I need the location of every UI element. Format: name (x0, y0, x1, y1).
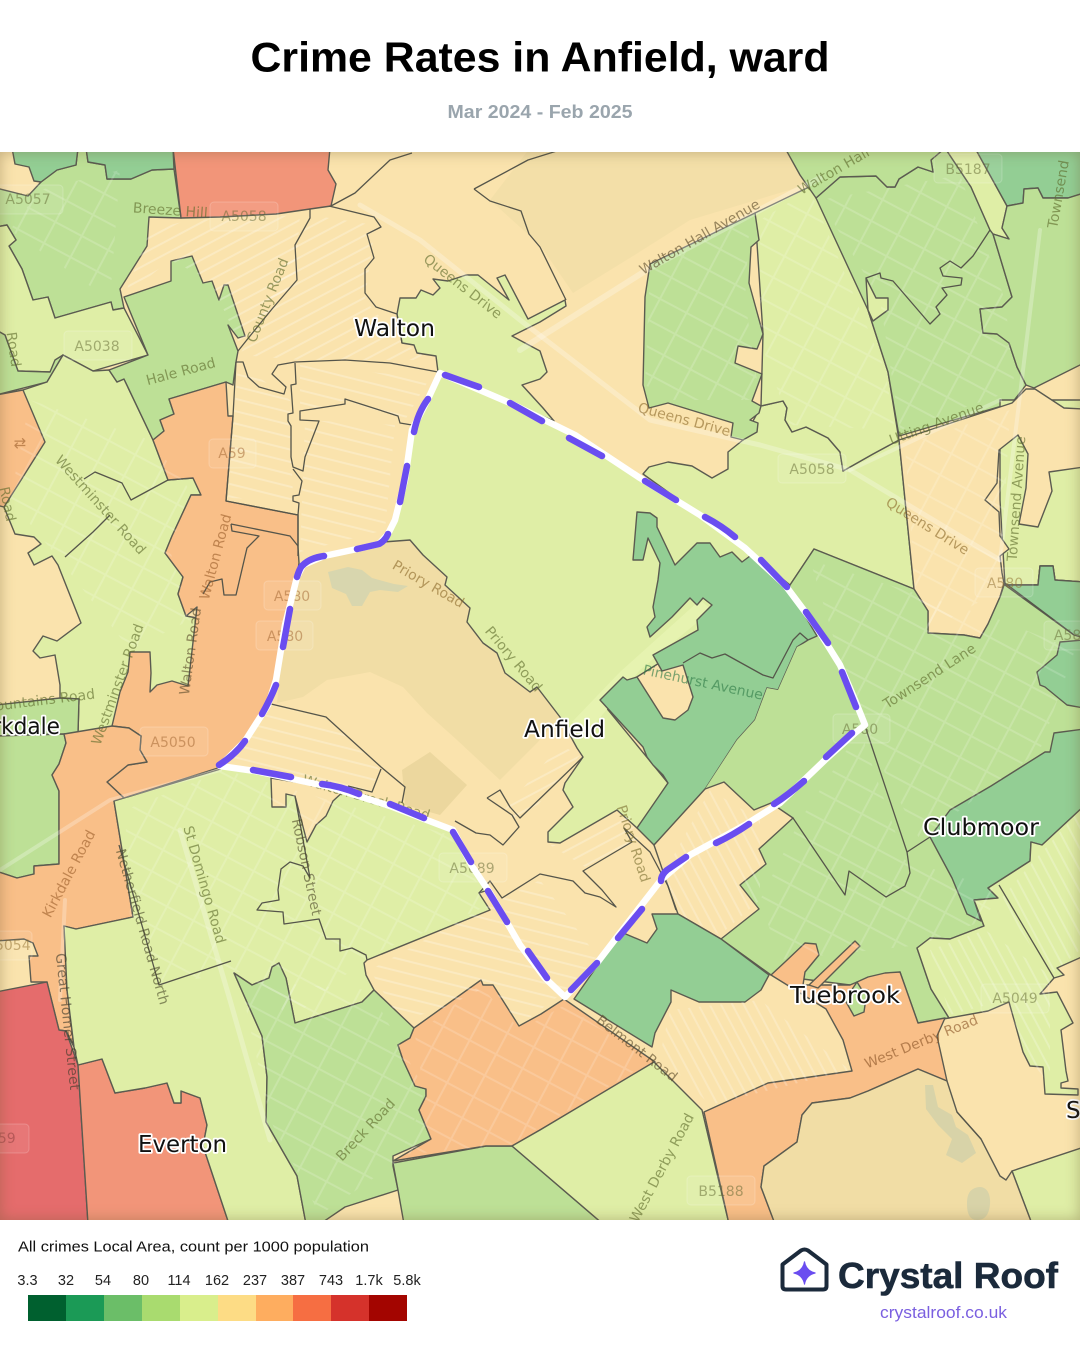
road name labels: West Derby Road (627, 1111, 698, 1225)
road name labels: Breck Road (333, 1096, 399, 1165)
road name labels: Walton Breck Road (301, 772, 432, 824)
Anfield ward outline: white base (220, 373, 865, 997)
road name labels: West Derby Road (863, 1012, 980, 1072)
road name labels: Priory Road (481, 624, 545, 695)
legend colour swatches (28, 1295, 407, 1321)
legend scale values: 1.7k (355, 1273, 383, 1289)
logo wordmark: Crystal Roof (838, 1255, 1059, 1296)
road number shields: B5188 (698, 1184, 744, 1200)
road number shields (0, 154, 1080, 1205)
ward boundary lines between neighbourhoods (65, 150, 1074, 1139)
Anfield ward outline: purple dashes (219, 375, 856, 990)
legend scale values: 114 (167, 1273, 191, 1289)
icon: house with star (782, 1250, 826, 1290)
road name labels: Walton Road (177, 607, 205, 696)
road name labels: Road (3, 331, 23, 368)
road name labels: St Domingo Road (179, 824, 228, 946)
legend scale values: 54 (95, 1273, 111, 1289)
place name labels: Tuebrook (789, 983, 901, 1009)
place name labels: Everton (138, 1132, 227, 1158)
road number shields: A5058 (221, 209, 267, 225)
road name labels: Kirkdale Road (40, 828, 99, 920)
legend scale values (17, 1273, 421, 1289)
road number shields: A580 (842, 722, 878, 738)
road number shields: A580 (274, 589, 310, 605)
road number shields: A580 (267, 629, 303, 645)
place name labels (0, 316, 1080, 1158)
road name labels: Walton Hall Avenue (637, 197, 763, 279)
legend scale values: 80 (133, 1273, 149, 1289)
road number shields: A5038 (74, 339, 120, 355)
road name labels: Netherfield Road North (112, 847, 172, 1007)
road name labels: Pinehurst Avenue (641, 663, 764, 704)
legend scale values: 743 (319, 1273, 343, 1289)
road name labels: ⇄ (14, 434, 27, 452)
legend scale values: 237 (243, 1273, 267, 1289)
road name labels: County Road (244, 256, 292, 345)
road name labels: Hale Road (145, 355, 217, 389)
road name labels: Walton Road (197, 512, 235, 602)
legend scale values: 32 (58, 1273, 74, 1289)
road number shields: A5057 (5, 192, 51, 208)
road number shields: A5058 (789, 462, 835, 478)
road name labels: Queens Drive (636, 400, 732, 440)
road name labels: Priory Road (613, 803, 653, 884)
place name labels: Anfield (524, 717, 605, 743)
place name labels: Clubmoor (923, 815, 1040, 841)
road name labels: Belmont Road (593, 1012, 680, 1085)
road name labels: Westminster Road (89, 622, 148, 747)
road name labels: Queens Drive (420, 251, 505, 322)
road number shields: B5187 (945, 162, 991, 178)
road number shields: A5050 (150, 735, 196, 751)
road name labels: Townsend Lane (880, 641, 979, 713)
legend (17, 1240, 421, 1321)
road name labels: Breeze Hill (132, 200, 208, 222)
street network overlay (0, 170, 1080, 1215)
legend scale values: 387 (281, 1273, 305, 1289)
road name labels: Utting Avenue (887, 400, 986, 449)
road name labels: Townsend (1045, 159, 1073, 231)
road name labels (0, 145, 1073, 1225)
title: Crime Rates in Anfield, ward (250, 34, 830, 80)
map regions: crime-rate areas (0, 148, 1080, 1224)
road name labels: Robson Street (288, 817, 324, 917)
place name labels: Walton (354, 316, 435, 342)
road number shields: A580 (987, 576, 1023, 592)
road name labels: Townsend Avenue (1005, 436, 1029, 563)
date range subtitle: Mar 2024 - Feb 2025 (448, 101, 632, 122)
website url: crystalroof.co.uk (880, 1304, 1008, 1322)
road name labels: Queens Drive (883, 495, 972, 559)
road name labels: Priory Road (389, 558, 467, 611)
legend title: All crimes Local Area, count per 1000 population (18, 1240, 369, 1256)
road name labels: Great Homer Street (52, 952, 82, 1091)
road name labels: Walton Hall (795, 145, 873, 198)
road name labels: Westminster Road (51, 453, 149, 558)
road number shields: A5049 (992, 991, 1038, 1007)
logo (782, 1250, 1059, 1322)
road number shields: A5089 (449, 861, 495, 877)
legend scale values: 5.8k (393, 1273, 421, 1289)
road number shields: A59 (218, 446, 246, 462)
legend scale values: 162 (205, 1273, 229, 1289)
legend scale values: 3.3 (17, 1273, 38, 1289)
